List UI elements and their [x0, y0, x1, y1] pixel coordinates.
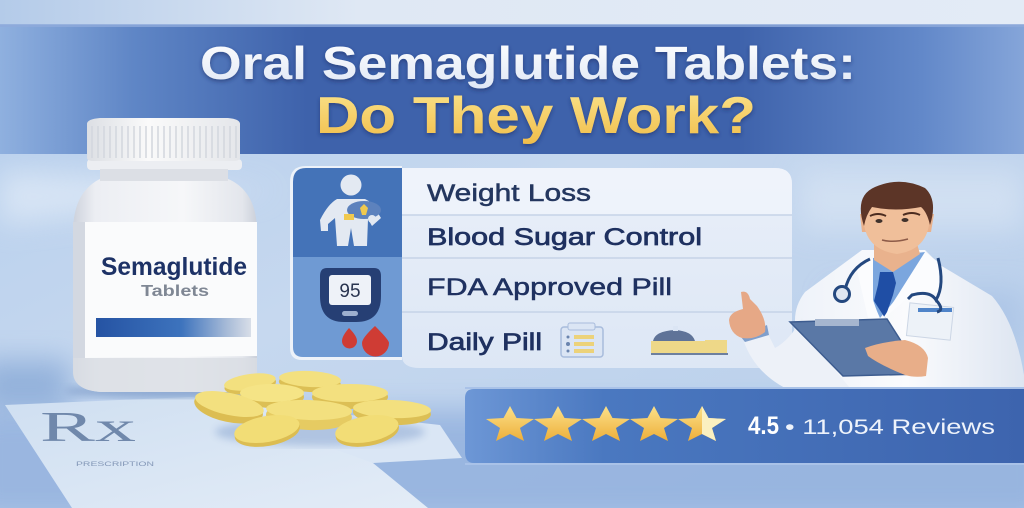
pill: [240, 384, 304, 408]
icon: calendar: [561, 323, 603, 357]
left arm: [744, 318, 850, 388]
label stripe: [96, 318, 251, 337]
icon column: [290, 166, 402, 360]
tie: [874, 272, 896, 318]
doctor: [729, 182, 1024, 388]
shirt: [872, 252, 925, 318]
paper caption: PRESCRIPTION: [76, 462, 154, 468]
pills: [191, 369, 431, 451]
hand: [865, 340, 928, 377]
bottle body: [73, 178, 257, 392]
pill: [353, 399, 431, 426]
pill: [265, 399, 352, 431]
row: weight loss: Weight Loss: [427, 180, 591, 207]
rating score: 4.5: [748, 412, 779, 440]
coat: [790, 250, 1024, 388]
clipboard: [790, 319, 922, 376]
lapel: [857, 252, 940, 320]
label name: Semaglutide: [101, 253, 247, 281]
prescription paper: [5, 397, 462, 508]
icon: glucose meter: [320, 268, 381, 322]
pill: [312, 384, 388, 409]
bottle collar: [87, 159, 242, 170]
pill: [191, 386, 266, 429]
bottle cap: [87, 118, 240, 161]
hair: [861, 182, 933, 226]
pill bottle: [65, 118, 275, 398]
thumbs up: [729, 292, 765, 338]
icon: glucose meter: 95: [339, 281, 361, 302]
coat pocket: [906, 303, 954, 340]
stethoscope: [834, 258, 941, 312]
bottle label: [73, 222, 257, 358]
row: daily pill: Daily Pill: [427, 329, 542, 356]
pill: [232, 410, 302, 451]
text rows: [402, 168, 792, 368]
sleeve cuff: [741, 325, 769, 342]
ears: [860, 214, 934, 232]
label subtitle: Tablets: [141, 283, 209, 300]
rx symbol: Rx: [40, 405, 136, 451]
title banner: [0, 24, 1024, 154]
review count: • 11,054 Reviews: [785, 416, 995, 439]
neck: [874, 240, 920, 272]
star rating: [486, 406, 726, 441]
pill: [278, 369, 341, 394]
title line 1: Oral Semaglutide Tablets:: [200, 37, 856, 89]
pill: [333, 411, 401, 451]
face details: [870, 213, 920, 241]
row: fda approved: FDA Approved Pill: [427, 274, 672, 301]
head: [864, 190, 929, 254]
icon: meal tray: [651, 326, 728, 355]
pill: [223, 370, 277, 398]
benefits panel: [290, 166, 792, 368]
row: blood sugar: Blood Sugar Control: [427, 224, 702, 251]
icon: blood drops: [342, 326, 389, 356]
rating bar: [465, 388, 1024, 464]
icon: body: [320, 174, 381, 246]
title line 2: Do They Work?: [316, 87, 756, 145]
